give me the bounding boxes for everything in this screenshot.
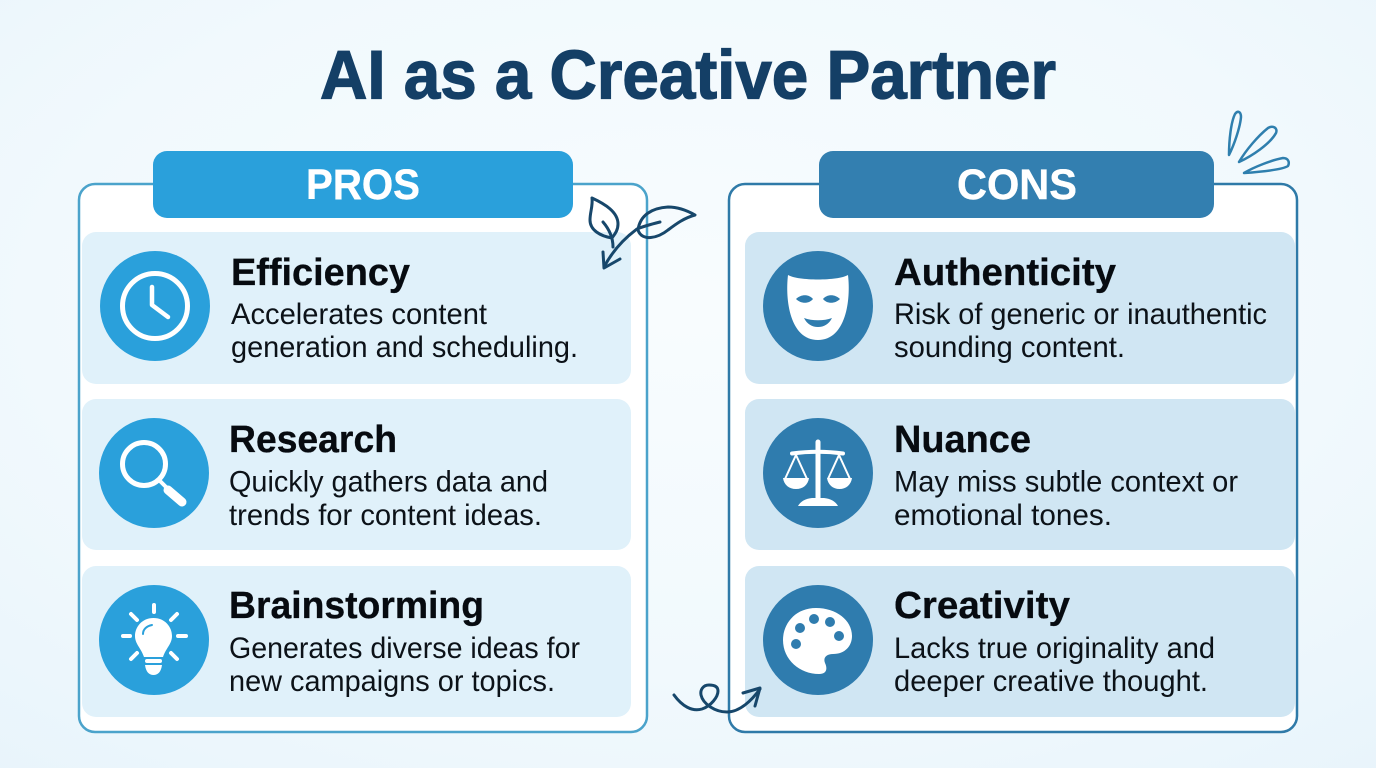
creativity text: Lacks true originality and bbox=[894, 632, 1215, 665]
creativity text: deeper creative thought. bbox=[894, 665, 1208, 698]
doodle: spark lines bbox=[1229, 112, 1289, 173]
efficiency text: generation and scheduling. bbox=[231, 331, 578, 364]
cons header bbox=[819, 151, 1214, 218]
icon: palette bbox=[763, 585, 873, 695]
row: creativity bbox=[745, 566, 1295, 717]
cons header: CONS bbox=[957, 161, 1077, 209]
icon: clock bbox=[100, 251, 210, 361]
row: authenticity bbox=[745, 232, 1295, 384]
icon: scales bbox=[763, 418, 873, 528]
panel: cons bbox=[729, 151, 1297, 732]
creativity text bbox=[894, 585, 1215, 698]
creativity text: Creativity bbox=[894, 585, 1070, 627]
row: brainstorming bbox=[82, 566, 631, 717]
icon: magnifier bbox=[99, 418, 209, 528]
authenticity text: Risk of generic or inauthentic bbox=[894, 298, 1267, 331]
row: efficiency bbox=[82, 232, 631, 384]
nuance text bbox=[894, 419, 1238, 532]
research text: Research bbox=[229, 419, 397, 461]
efficiency text: Accelerates content bbox=[231, 298, 488, 331]
brainstorming text: new campaigns or topics. bbox=[229, 665, 555, 698]
research text bbox=[229, 419, 548, 532]
authenticity text bbox=[894, 252, 1267, 364]
efficiency text: Efficiency bbox=[231, 252, 410, 294]
authenticity text: Authenticity bbox=[894, 252, 1116, 294]
brainstorming text: Brainstorming bbox=[229, 585, 484, 627]
icon: light bulb bbox=[99, 585, 209, 695]
authenticity text: sounding content. bbox=[894, 331, 1125, 364]
doodle: leaf sprig arrow bbox=[590, 198, 695, 268]
pros header bbox=[153, 151, 573, 218]
pros header: PROS bbox=[306, 161, 420, 209]
nuance text: Nuance bbox=[894, 419, 1031, 461]
doodle: swirl arrow bbox=[674, 685, 760, 712]
brainstorming text bbox=[229, 585, 580, 698]
panel: pros bbox=[79, 151, 647, 732]
icon: theatre mask bbox=[763, 251, 873, 361]
row: nuance bbox=[745, 399, 1295, 550]
research text: Quickly gathers data and bbox=[229, 466, 548, 498]
brainstorming text: Generates diverse ideas for bbox=[229, 632, 580, 665]
research text: trends for content ideas. bbox=[229, 499, 542, 532]
nuance text: May miss subtle context or bbox=[894, 466, 1238, 498]
row: research bbox=[82, 399, 631, 550]
nuance text: emotional tones. bbox=[894, 499, 1112, 532]
title: AI as a Creative Partner bbox=[320, 36, 1056, 114]
efficiency text bbox=[231, 252, 578, 364]
